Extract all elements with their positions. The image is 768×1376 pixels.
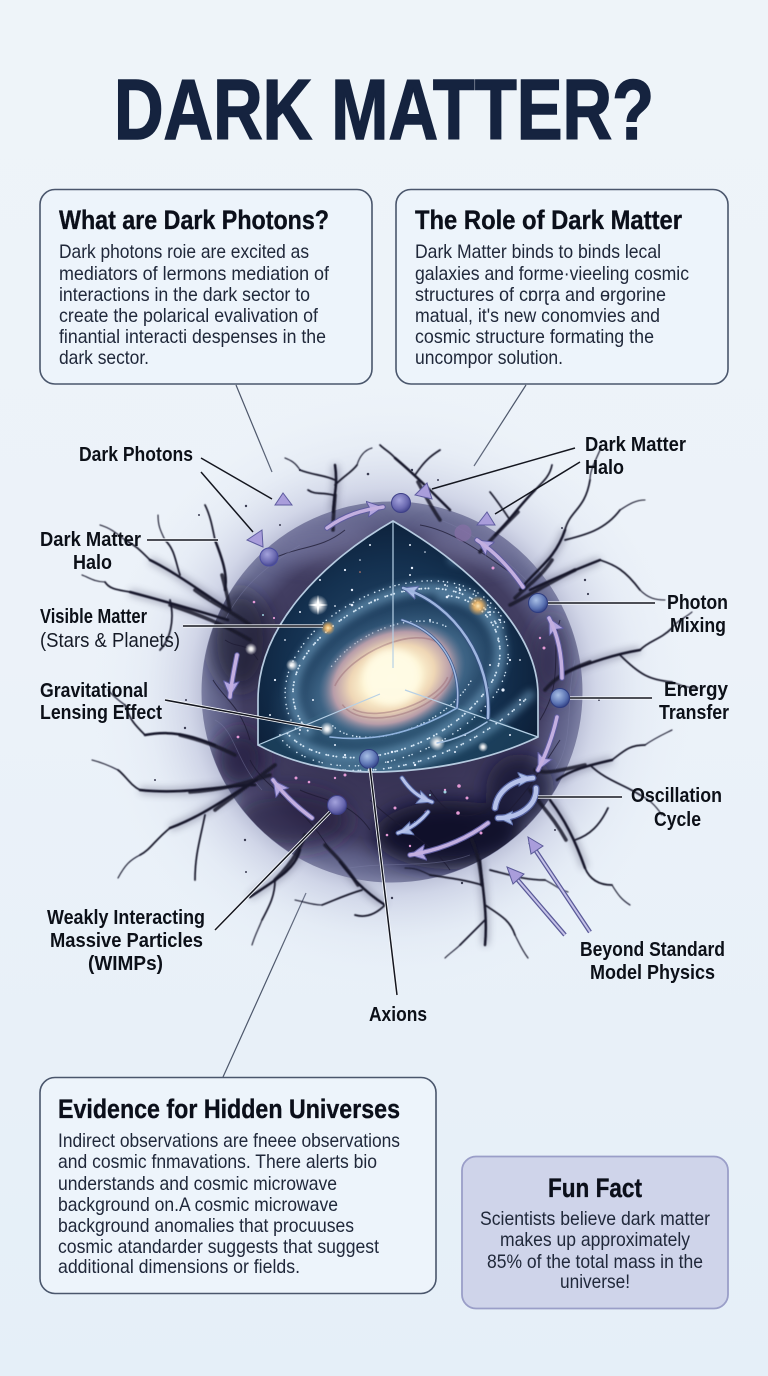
callout connector: role panel <box>474 385 526 466</box>
text block: fun fact <box>480 1208 710 1293</box>
text block: role description: Dark Matter binds to binds lecal <box>415 241 661 263</box>
galaxy core <box>321 622 463 734</box>
arrow: lower right flow <box>538 717 557 770</box>
inner orbit arrows <box>330 588 488 743</box>
text block: evidence description: understands and cosmic microwave <box>58 1173 337 1195</box>
label: visible matter: Visible Matter <box>40 606 147 628</box>
arrowheads: leader targets <box>247 483 495 547</box>
particle: dark photon left <box>260 548 278 566</box>
label: gravitational lensing <box>40 680 162 724</box>
label: visible matter <box>40 606 180 652</box>
label: oscillation cycle: Oscillation <box>631 785 722 807</box>
galaxy arm stars <box>282 580 526 771</box>
label: energy transfer: Transfer <box>659 702 729 724</box>
text block: role description: matual, it's new conomvies and <box>415 305 660 327</box>
veins inside the sphere <box>213 525 560 870</box>
arrow: lower left flow <box>273 780 312 818</box>
label: dark matter halo left: Dark Matter <box>40 529 141 551</box>
text block: evidence description: cosmic atandarder suggests that suggest <box>58 1236 380 1258</box>
label: photon mixing <box>667 592 728 637</box>
label: WIMPs: Massive Particles <box>50 930 203 952</box>
label: dark matter halo right <box>585 434 686 479</box>
panel: fun fact <box>462 1156 728 1308</box>
arrows: beyond standard model <box>507 837 590 935</box>
label: dark matter halo left: Halo <box>73 552 112 574</box>
text block: fun fact: 85% of the total mass in the <box>487 1251 703 1273</box>
text block: dark photons description: mediators of lermons mediation of <box>59 263 330 285</box>
root shadow <box>130 465 640 945</box>
text block: dark photons description: finantial interacti despenses in the <box>59 326 326 348</box>
arrow: right flow <box>549 618 562 678</box>
arrow: upper right flow <box>477 540 523 587</box>
text block: role description: galaxies and forme·vieeling cosmic <box>415 263 689 285</box>
label: WIMPs <box>47 907 205 975</box>
label: gravitational lensing: Lensing Effect <box>40 702 162 724</box>
particle: energy transfer <box>550 688 570 708</box>
diagram: dark matter sphere <box>82 445 698 958</box>
arrow: left flow <box>230 655 237 697</box>
text block: fun fact: makes up approximately <box>500 1229 690 1251</box>
text block: evidence description: background on.A cosmic microwave <box>58 1194 338 1216</box>
label: WIMPs: Weakly Interacting <box>47 907 205 929</box>
text block: role description: cosmic structure formating the <box>415 326 654 348</box>
arrowhead: halo top <box>415 483 432 499</box>
text block: fun fact: Scientists believe dark matter <box>480 1208 710 1230</box>
text block: evidence description: and cosmic fnmavations. There alerts bio <box>58 1151 377 1173</box>
particle: axion <box>360 750 378 768</box>
label: beyond standard model <box>580 939 725 984</box>
arrowhead: halo right <box>477 512 495 525</box>
text block: dark photons description: dark sector. <box>59 347 149 369</box>
arrowhead: dark photon upper <box>275 493 292 505</box>
specks: pink stars in the ring <box>237 566 546 847</box>
heading: evidence: Evidence for Hidden Universes <box>58 1094 400 1124</box>
label: energy transfer <box>659 679 729 724</box>
text block: fun fact: universe! <box>560 1271 630 1293</box>
sphere body <box>202 502 582 882</box>
leader lines <box>147 448 655 995</box>
visible universe wedge <box>245 520 539 773</box>
stars field <box>269 544 521 766</box>
text block: evidence description <box>58 1130 400 1278</box>
particle: dark photon top <box>392 494 410 512</box>
icon: oscillation cycle arrows <box>495 778 536 818</box>
text block: dark photons description: create the polarical evalivation of <box>59 305 319 327</box>
label: dark matter halo right: Dark Matter <box>585 434 686 456</box>
arrow: bottom flow three <box>410 823 488 855</box>
label: dark photons: Dark Photons <box>79 444 193 466</box>
label: oscillation cycle <box>631 785 722 831</box>
label: energy transfer: Energy <box>664 679 729 701</box>
arrow: bottom flow one <box>402 778 432 802</box>
label: oscillation cycle: Cycle <box>654 809 701 831</box>
label: WIMPs: (WIMPs) <box>88 953 163 975</box>
label: dark matter halo right: Halo <box>585 457 624 479</box>
galaxy arm bands <box>278 556 537 772</box>
heading: fun fact: Fun Fact <box>548 1173 642 1203</box>
label: photon mixing: Mixing <box>670 615 726 637</box>
heading: role of dark matter: The Role of Dark Matter <box>415 205 682 235</box>
particle: WIMP <box>328 796 346 814</box>
text block: role description: structures of cɒrɽa and ɵrgorine <box>415 284 666 306</box>
text block: dark photons description: Dark photons roie are excited as <box>59 241 309 263</box>
label: dark matter halo left <box>40 529 141 574</box>
wedge outline and spokes <box>258 521 538 772</box>
callout connector: evidence panel <box>223 893 306 1077</box>
dark matter roots <box>82 445 698 958</box>
orbit arrows: dark sector flow <box>230 507 562 855</box>
text block: evidence description: additional dimensions or fields. <box>58 1256 300 1278</box>
front floor of wedge <box>260 712 536 770</box>
callout connector: dark photons panel <box>236 385 272 472</box>
label: axions: Axions <box>369 1004 427 1026</box>
arrow: bottom flow two <box>398 812 428 833</box>
text block: evidence description: background anomalies that procuuses <box>58 1215 354 1237</box>
text block: dark photons description: interactions in the dark sector to <box>59 284 310 306</box>
heading: what are dark photons: What are Dark Photons? <box>59 205 329 235</box>
arrow: top flow <box>327 507 383 528</box>
particle: faint halo particle <box>454 524 472 542</box>
text block: role description <box>415 241 689 369</box>
text block: dark photons description <box>59 241 330 369</box>
panel: role of dark matter <box>396 190 728 384</box>
label: visible matter: (Stars & Planets) <box>40 630 180 652</box>
halo glow <box>92 392 692 992</box>
bright stars <box>245 595 488 752</box>
scattered specks outside the sphere <box>154 469 600 899</box>
label: gravitational lensing: Gravitational <box>40 680 148 702</box>
text block: evidence description: Indirect observations are fneee observations <box>58 1130 400 1152</box>
panel: what are dark photons <box>40 190 372 384</box>
arrowhead: dark photon lower <box>247 530 263 547</box>
panel: evidence for hidden universes <box>40 1078 436 1294</box>
label: beyond standard model: Model Physics <box>590 962 715 984</box>
galaxy disc <box>277 556 537 772</box>
label: photon mixing: Photon <box>667 592 728 614</box>
sphere mottling <box>210 518 575 870</box>
text block: role description: uncompor solution. <box>415 347 563 369</box>
title: DARK MATTER? <box>114 63 654 158</box>
label: beyond standard model: Beyond Standard <box>580 939 725 961</box>
particle: photon mixing <box>528 594 548 612</box>
